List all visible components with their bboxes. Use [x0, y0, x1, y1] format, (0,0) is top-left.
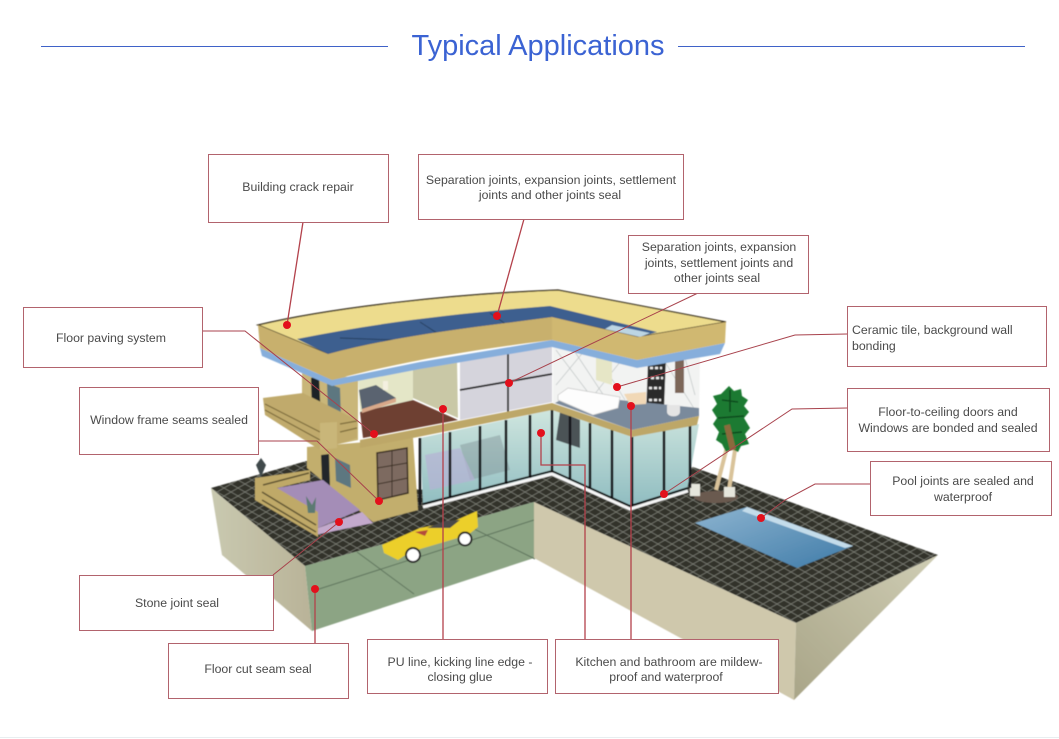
callout: pool joints: waterproof [933, 490, 993, 504]
callout: pool joints [870, 462, 1052, 516]
callout: PU line [368, 640, 548, 694]
callout: PU line: PU line, kicking line edge - [388, 655, 532, 669]
callout: separation joints top: joints and other joints seal [478, 188, 621, 202]
terrace [255, 458, 373, 537]
callout: pool joints: Pool joints are sealed and [892, 474, 1034, 488]
callout: ceramic tile [848, 306, 1046, 366]
upper floor [263, 345, 700, 450]
callout: separation joints right [628, 236, 808, 294]
title: Typical Applications [411, 30, 665, 62]
callout: stone joint seal [80, 576, 274, 630]
red marker dots [283, 312, 765, 593]
callout: floor-to-ceiling doors [848, 388, 1050, 452]
pool [695, 507, 853, 568]
car [382, 511, 478, 562]
callout: floor-to-ceiling doors: Windows are bonded and sealed [858, 421, 1038, 435]
callout: separation joints top [418, 154, 684, 220]
lower floor [307, 410, 699, 522]
callout: window frame seams [80, 388, 258, 454]
callout: floor paving system [24, 308, 202, 368]
callout: floor cut seam seal [168, 644, 348, 698]
palm tree [690, 386, 750, 503]
callout: separation joints top: Separation joints, expansion joints, settlement [426, 173, 677, 187]
callout: kitchen and bathroom: Kitchen and bathroom are mildew- [575, 655, 763, 669]
callout: stone joint seal: Stone joint seal [135, 596, 219, 610]
callout: kitchen and bathroom [556, 640, 778, 694]
callout: window frame seams: Window frame seams sealed [90, 413, 248, 427]
callout: PU line: closing glue [428, 670, 493, 684]
callout: building crack repair [208, 154, 388, 222]
building site base [211, 460, 938, 700]
callout: separation joints right: other joints seal [674, 271, 760, 285]
callout: separation joints right: Separation joints, expansion [642, 240, 796, 254]
callout: separation joints right: joints, settlement joints and [644, 256, 793, 270]
callout: ceramic tile: Ceramic tile, background wall [852, 323, 1013, 337]
callout: floor paving system: Floor paving system [56, 331, 166, 345]
house illustration [211, 290, 938, 700]
callout: ceramic tile: bonding [852, 339, 896, 353]
leader lines [202, 219, 870, 643]
callout: floor cut seam seal: Floor cut seam seal [204, 662, 312, 676]
callout: building crack repair: Building crack repair [242, 180, 354, 194]
callout: kitchen and bathroom: proof and waterproof [609, 670, 723, 684]
roof [258, 290, 726, 386]
callout: floor-to-ceiling doors: Floor-to-ceiling doors and [878, 405, 1018, 419]
